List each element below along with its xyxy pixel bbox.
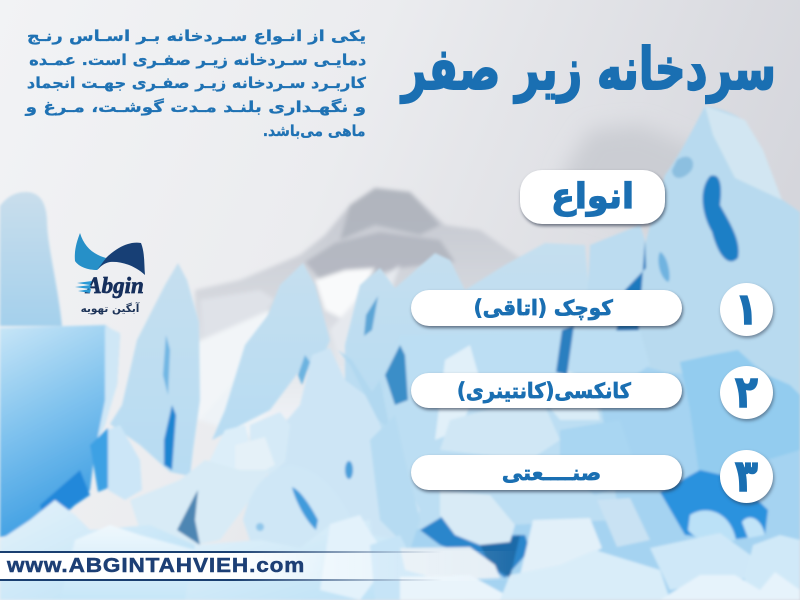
boulder white large (440, 490, 515, 545)
number 1: ۱ (735, 284, 758, 335)
pill 2 (411, 373, 682, 408)
intro paragraph: کاربـرد سـردخانه زیـر صفـری جهـت انجماد (27, 74, 366, 92)
central blue dimple (345, 461, 353, 479)
logo name: Abgin (84, 273, 144, 298)
left block shadow (40, 470, 90, 515)
cave ice boulder (688, 510, 736, 542)
intro paragraph: ماهی می‌باشد. (263, 122, 366, 140)
pill 3 (411, 455, 682, 490)
blue ice cave (660, 470, 768, 540)
tall spike blue cleft (164, 405, 176, 470)
number 2 (720, 366, 773, 419)
ridge blue cleft (364, 296, 378, 336)
logo (74, 233, 145, 315)
centre mid facet (440, 395, 560, 460)
iceberg: back centre ridge (345, 240, 640, 430)
heading pill: types (520, 170, 665, 224)
intro paragraph: دمایـی سـردخانه زیـر صفـری است. عمـده (29, 51, 366, 69)
number 3 (720, 450, 773, 503)
iceberg: right large peak (620, 106, 800, 430)
mountains (190, 188, 560, 440)
intro paragraph: یکی از انـواع سـردخانه بـر اسـاس رنـج (27, 27, 366, 45)
stone lower middle (500, 550, 670, 600)
boulder dimple (256, 523, 264, 531)
dark cave centre (420, 515, 530, 578)
title: سردخانه زیر صفر (402, 35, 776, 103)
rubble pale 1 (205, 425, 250, 470)
lower rubble right (650, 533, 762, 590)
front rubble left light (60, 525, 200, 600)
right lower ridge (680, 350, 800, 480)
central shade (338, 350, 390, 430)
boulder crack (292, 487, 318, 530)
flat stone (400, 547, 500, 580)
stone B (520, 518, 602, 575)
stone C (597, 498, 650, 547)
rubble pale 3 (235, 437, 275, 478)
logo wing light blue (75, 233, 106, 270)
peak small hollow (658, 252, 670, 282)
front boulder (320, 515, 390, 600)
number 2: ۲ (735, 367, 758, 418)
central right slab (370, 415, 420, 550)
heading pill: types: انواع (551, 177, 634, 217)
bottom right rubble (660, 572, 800, 600)
centre block behind pills (370, 330, 650, 530)
left block side facet (96, 326, 120, 445)
footer url text: www.ABGINTAHVIEH.com (7, 554, 305, 577)
peak lower left facet (585, 225, 645, 350)
right lower blue mass (400, 352, 800, 600)
number 3: ۳ (735, 451, 758, 502)
pill 3: صنــــعتی (502, 460, 601, 484)
peak blue hollow (703, 175, 739, 261)
intro paragraph: و نگهـداری بلنـد مـدت گوشـت، مـرغ و (26, 98, 366, 116)
ice block: left large (0, 325, 120, 537)
footer url strip (0, 551, 520, 581)
pill 1: کوچک (اتاقی) (474, 296, 613, 320)
centre pale facet (540, 370, 600, 420)
front rubble left (0, 500, 200, 600)
ice mass: central (270, 348, 420, 560)
rubble dark cave (177, 490, 200, 545)
pill 2: کانکسی(کانتینری) (457, 378, 630, 402)
peak deep cleft (612, 240, 646, 350)
number 1 (720, 283, 773, 336)
dark cave deep (480, 535, 520, 578)
tall spike blue line (163, 335, 170, 395)
logo wing dark navy (97, 243, 145, 275)
logo persian name: آبگین تهویه (81, 302, 140, 315)
rubble pale 2 (250, 412, 290, 475)
pill 1 (411, 290, 682, 326)
intro paragraph (24, 27, 366, 140)
logo flame lines (75, 281, 92, 293)
front rubble centre (185, 520, 450, 600)
peak soft patch (672, 157, 693, 178)
far right rubble (740, 535, 800, 600)
iceberg: far left pillar (0, 192, 62, 326)
rubble mid left (130, 460, 270, 545)
left block side cleft (90, 428, 108, 492)
centre dark cleft (556, 325, 574, 375)
distant cloud peak (560, 125, 700, 240)
left boulder (108, 425, 142, 500)
rounded boulder (243, 465, 365, 555)
spike cleft (298, 355, 310, 385)
centre pale facet left (435, 345, 480, 440)
cave right boulder (742, 518, 765, 538)
front boulder blue (370, 535, 420, 600)
ice spike: centre-left (212, 263, 330, 440)
ice spike: tall (110, 263, 200, 476)
centre right facet (560, 420, 640, 495)
peak highlight (705, 106, 782, 200)
central dark crevice (385, 345, 408, 405)
bottom slab (400, 575, 515, 600)
